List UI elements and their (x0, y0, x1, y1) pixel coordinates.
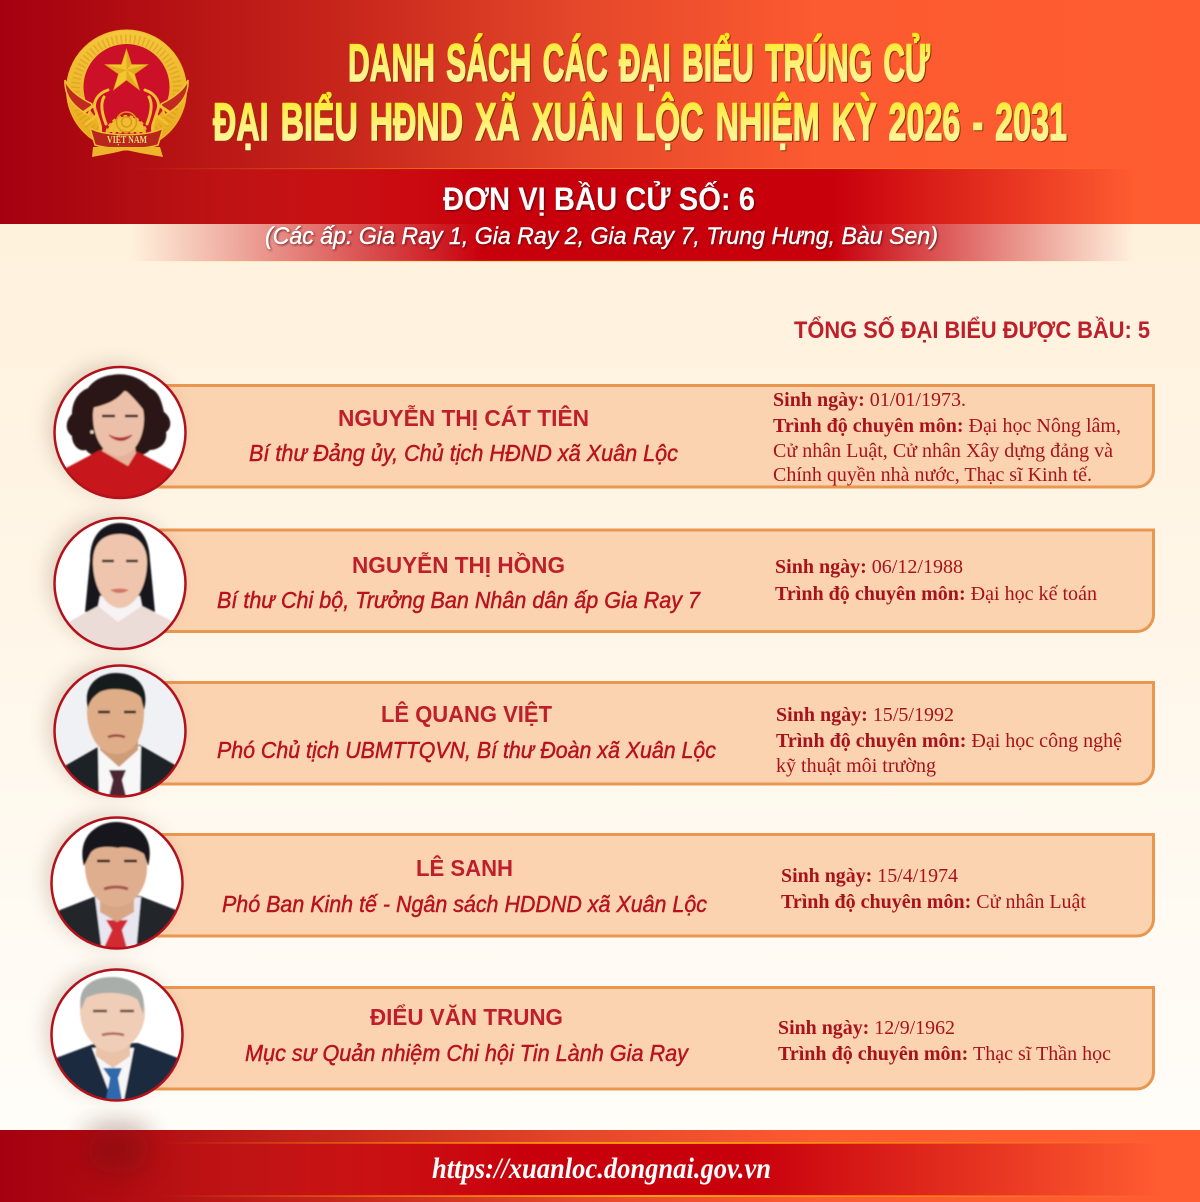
panel: delegate 4 (117, 834, 1154, 936)
delegate 1 name: NGUYỄN THỊ CÁT TIÊN (338, 403, 589, 431)
footer banner (0, 1116, 1200, 1202)
delegate 3 name: LÊ QUANG VIỆT (381, 700, 553, 727)
delegate 4 role: Phó Ban Kinh tế - Ngân sách HDDND xã Xuân Lộc (222, 891, 707, 917)
delegate 5 details: Trình độ chuyên môn: Thạc sĩ Thần học (778, 1044, 1111, 1065)
delegate 5 details: Sinh ngày: 12/9/1962 (778, 1018, 955, 1039)
heading: electoral unit: ĐƠN VỊ BẦU CỬ SỐ: 6 (443, 181, 755, 217)
panel: delegate 3 (120, 682, 1154, 784)
delegate 4 details (781, 866, 1087, 913)
delegate 2 details: Trình độ chuyên môn: Đại học kế toán (775, 584, 1097, 605)
delegate 3 details (776, 705, 1122, 777)
photo: Lê Quang Việt (47, 661, 186, 810)
delegate 5 details (778, 1018, 1111, 1065)
delegate 3 details: Trình độ chuyên môn: Đại học công nghệ (776, 731, 1122, 752)
delegate 5 name: ĐIỂU VĂN TRUNG (370, 1003, 563, 1030)
delegate 5 role: Mục sư Quản nhiệm Chi hội Tin Lành Gia Ray (245, 1040, 689, 1066)
delegate 1 details: Cử nhân Luật, Cử nhân Xây dựng đảng và (773, 441, 1113, 462)
delegate 3 details: kỹ thuật môi trường (776, 756, 936, 777)
header banner (0, 0, 1200, 262)
delegate 1 details: Sinh ngày: 01/01/1973. (773, 390, 966, 411)
delegate 4 name: LÊ SANH (416, 854, 513, 881)
total delegates: TỔNG SỐ ĐẠI BIỂU ĐƯỢC BẦU: 5 (794, 316, 1150, 344)
delegate 3 role: Phó Chủ tịch UBMTTQVN, Bí thư Đoàn xã Xuân Lộc (217, 737, 716, 763)
icon: national emblem (65, 30, 188, 157)
title (213, 33, 1067, 152)
emblem ribbon label: VIỆT NAM (107, 133, 147, 146)
panel: delegate 1 (120, 386, 1154, 487)
delegate 2 name: NGUYỄN THỊ HỒNG (352, 550, 565, 578)
delegate 2 details (775, 557, 1097, 605)
delegate 1 details: Trình độ chuyên môn: Đại học Nông lâm, (773, 416, 1121, 437)
delegate 1 details: Chính quyền nhà nước, Thạc sĩ Kinh tế. (773, 465, 1092, 486)
delegate 4 details: Sinh ngày: 15/4/1974 (781, 866, 958, 887)
delegate 4 details: Trình độ chuyên môn: Cử nhân Luật (781, 892, 1087, 913)
subheading: hamlets: (Các ấp: Gia Ray 1, Gia Ray 2, Gia Ray 7, Trung Hưng, Bàu Sen) (265, 223, 938, 250)
delegate 3 details: Sinh ngày: 15/5/1992 (776, 705, 954, 726)
delegate 1 details (773, 390, 1121, 486)
photo: Điểu Văn Trung (44, 965, 188, 1110)
photo: Nguyễn Thị Hồng (47, 513, 186, 660)
panel: delegate 2 (120, 530, 1154, 632)
delegate 1 role: Bí thư Đảng ủy, Chủ tịch HĐND xã Xuân Lộc (249, 440, 678, 466)
photo: Nguyễn Thị Cát Tiên (47, 362, 186, 510)
footer url: https://xuanloc.dongnai.gov.vn (432, 1152, 771, 1185)
delegate 2 details: Sinh ngày: 06/12/1988 (775, 557, 963, 578)
photo: Lê Sanh (44, 813, 186, 960)
panel: delegate 5 (117, 988, 1154, 1089)
delegate 2 role: Bí thư Chi bộ, Trưởng Ban Nhân dân ấp Gia Ray 7 (217, 587, 701, 613)
